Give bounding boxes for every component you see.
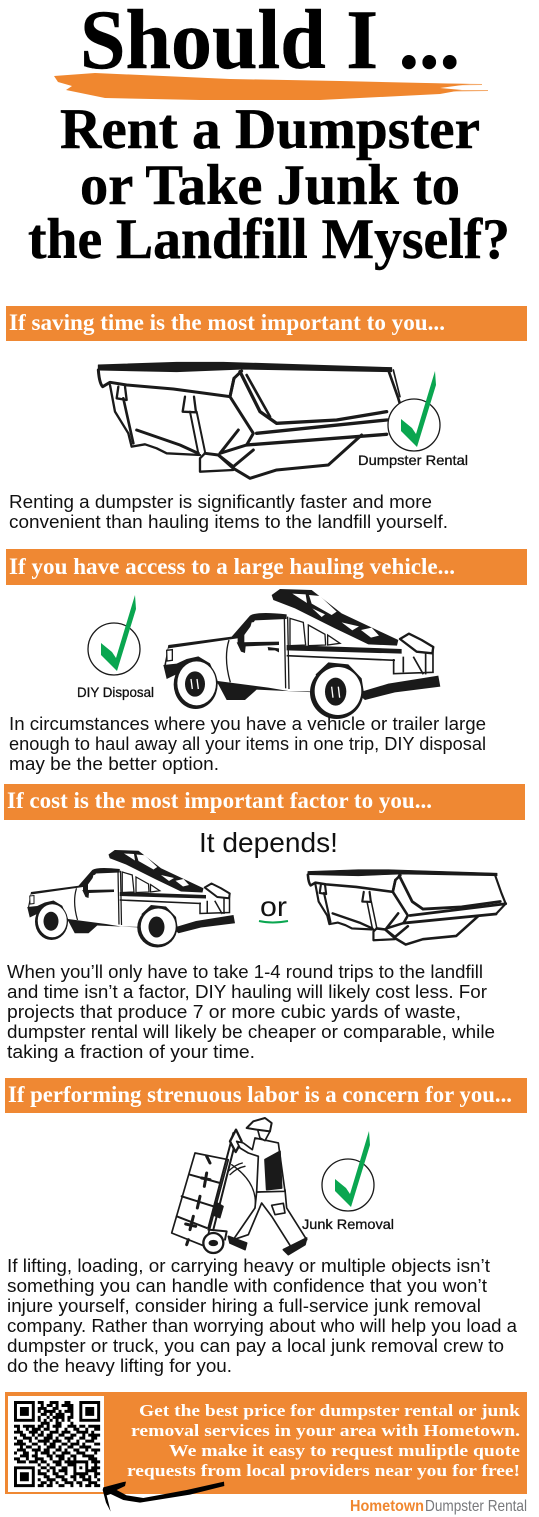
panel: saving time bbox=[6, 306, 527, 532]
text block: hauling vehicle bbox=[9, 714, 486, 774]
text block: labor: do the heavy lifting for you. bbox=[7, 1356, 232, 1376]
text block: cost: When you’ll only have to take 1-4 round trips to the landfill bbox=[7, 962, 483, 982]
label: or with green underline: or bbox=[260, 891, 287, 922]
subtitle: the Landfill Myself? bbox=[28, 208, 510, 271]
callout: It depends: It depends! bbox=[199, 827, 338, 858]
heading bar: hauling vehicle: If you have access to a large hauling vehicle... bbox=[9, 554, 455, 579]
text block: cost: and time isn’t a factor, DIY hauling will likely cost less. For bbox=[7, 982, 487, 1002]
icon: check circle bbox=[388, 371, 440, 451]
icon: check circle bbox=[88, 595, 140, 675]
text block: hauling vehicle: enough to haul away all your items in one trip, DIY disposal bbox=[9, 734, 486, 754]
logo: Hometown Dumpster Rental bbox=[350, 1498, 527, 1515]
text block: call to action: removal services in your area with Hometown. bbox=[131, 1421, 520, 1440]
label: Dumpster Rental: Dumpster Rental bbox=[358, 452, 468, 468]
text block: cost: projects that produce 7 or more cubic yards of waste, bbox=[7, 1002, 461, 1022]
heading bar: labor bbox=[5, 1078, 527, 1113]
text block: saving time: Renting a dumpster is significantly faster and more bbox=[9, 492, 432, 512]
text block: call to action: requests from local providers near you for free! bbox=[127, 1461, 520, 1480]
text block: labor: injure yourself, consider hiring a full-service junk removal bbox=[7, 1296, 481, 1316]
icon: dumpster bbox=[98, 362, 403, 478]
text block: labor: If lifting, loading, or carrying heavy or multiple objects isn’t bbox=[7, 1256, 490, 1276]
panel: strenuous labor bbox=[5, 1078, 527, 1376]
QR code bbox=[8, 1396, 104, 1492]
logo: Hometown Dumpster Rental: Hometown bbox=[350, 1498, 424, 1515]
text block: labor: something you can handle with confidence that you won’t bbox=[7, 1276, 487, 1296]
panel: hauling vehicle bbox=[6, 549, 527, 774]
panel: call to action footer bbox=[5, 1392, 527, 1494]
text block: cost: taking a fraction of your time. bbox=[7, 1042, 255, 1062]
orange brush stroke bbox=[54, 73, 488, 100]
arrow to QR code bbox=[103, 1482, 224, 1512]
text block: labor bbox=[7, 1256, 518, 1376]
text block: saving time: convenient than hauling items to the landfill yourself. bbox=[9, 512, 448, 532]
text block: labor: dumpster or truck, you can pay a local junk removal crew to bbox=[7, 1336, 504, 1356]
subtitle bbox=[28, 98, 510, 271]
text block: call to action: Get the best price for dumpster rental or junk bbox=[139, 1401, 521, 1420]
icon: check circle bbox=[322, 1131, 374, 1211]
heading bar: labor: If performing strenuous labor is a concern for you... bbox=[8, 1082, 512, 1107]
heading bar: cost bbox=[4, 784, 525, 820]
heading bar: hauling vehicle bbox=[6, 549, 527, 585]
text block: cost: dumpster rental will likely be cheaper or comparable, while bbox=[7, 1022, 495, 1042]
icon: pickup truck bbox=[27, 850, 235, 948]
subtitle: Rent a Dumpster bbox=[60, 98, 480, 161]
text block: cost bbox=[7, 962, 495, 1062]
text block: hauling vehicle: In circumstances where you have a vehicle or trailer large bbox=[9, 714, 486, 734]
heading bar: saving time: If saving time is the most important to you... bbox=[9, 310, 445, 335]
heading bar: cost: If cost is the most important factor to you... bbox=[7, 788, 432, 813]
heading bar: saving time bbox=[6, 306, 527, 341]
subtitle: or Take Junk to bbox=[80, 154, 460, 217]
icon: dumpster bbox=[308, 870, 506, 945]
text block: labor: company. Rather than worrying about who will help you load a bbox=[7, 1316, 518, 1336]
panel: cost bbox=[4, 784, 525, 1062]
text block: hauling vehicle: may be the better option. bbox=[9, 754, 219, 774]
label: DIY Disposal: DIY Disposal bbox=[77, 684, 154, 700]
label: Junk Removal: Junk Removal bbox=[302, 1216, 394, 1232]
text block: call to action: We make it easy to request muliptle quote bbox=[169, 1441, 520, 1460]
icon: worker with hand truck bbox=[172, 1118, 307, 1255]
icon: pickup truck bbox=[163, 589, 440, 719]
text block: call to action bbox=[127, 1401, 521, 1480]
text block: saving time bbox=[9, 492, 448, 532]
